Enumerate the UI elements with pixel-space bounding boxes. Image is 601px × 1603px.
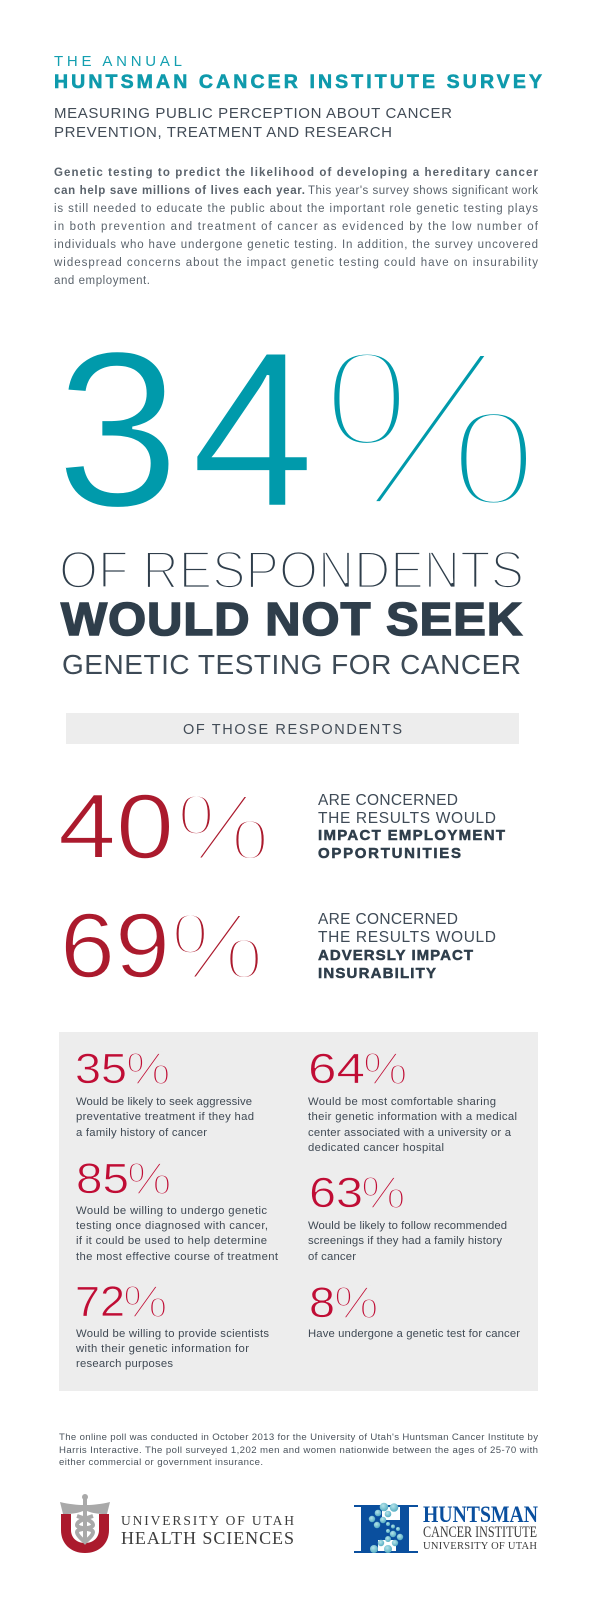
- finding: 85%: %: [127, 1154, 171, 1204]
- subtitle: PREVENTION, TREATMENT AND RESEARCH: [54, 124, 392, 141]
- finding: 8%: %: [334, 1278, 378, 1328]
- finding: 63%: [308, 1168, 507, 1263]
- finding: 35%: a family history of cancer: [76, 1127, 207, 1139]
- statistic: 40% employment: [58, 775, 270, 881]
- logo wordmark: [423, 1502, 538, 1552]
- header: survey title: HUNTSMAN CANCER INSTITUTE SURVEY: [54, 71, 542, 93]
- finding: 85%: if it could be used to help determine: [76, 1235, 267, 1247]
- icon: H with molecule strand: [354, 1503, 418, 1553]
- finding: 72%: %: [123, 1277, 167, 1327]
- panel: additional findings: [59, 1032, 538, 1391]
- hero statistic: 34%: 34: [56, 306, 314, 554]
- finding: 8%: Have undergone a genetic test for cancer: [308, 1328, 520, 1340]
- logo: Huntsman Cancer Institute: [354, 1502, 538, 1553]
- intro paragraph: is still needed to educate the public about the important role genetic testing plays: [54, 203, 538, 215]
- banner: of those respondents: OF THOSE RESPONDENTS: [183, 722, 402, 738]
- footnote: methodology: Harris Interactive. The poll surveyed 1,202 men and women nationwide between the ages of 25-70 with: [59, 1445, 538, 1456]
- finding: 64%: Would be most comfortable sharing: [308, 1096, 496, 1108]
- finding: 85%: testing once diagnosed with cancer,: [76, 1220, 268, 1232]
- header: survey title: THE ANNUAL: [54, 53, 182, 70]
- finding: 72%: [75, 1277, 269, 1370]
- statistic: 69% insurability: [60, 894, 264, 1000]
- intro paragraph: in both prevention and treatment of cancer as evidenced by the low number of: [54, 221, 539, 233]
- footnote: methodology: either commercial or government insurance.: [59, 1457, 263, 1468]
- finding: 64%: %: [363, 1044, 407, 1094]
- finding: 64%: their genetic information with a medical: [308, 1111, 517, 1123]
- intro paragraph: individuals who have undergone genetic testing. In addition, the survey uncovered: [54, 239, 538, 251]
- statistic: 69% insurability: 69: [60, 895, 170, 997]
- finding: 85%: [76, 1154, 279, 1263]
- description: insurability concern: [318, 911, 496, 982]
- finding: 63%: 63: [309, 1169, 363, 1217]
- finding: 63%: screenings if they had a family history: [308, 1235, 502, 1247]
- finding: 63%: %: [361, 1168, 405, 1218]
- finding: 35%: 35: [75, 1045, 127, 1093]
- finding: 35%: preventative treatment if they had: [76, 1111, 254, 1123]
- logo wordmark: CANCER INSTITUTE: [423, 1524, 537, 1541]
- intro paragraph: [53, 167, 539, 287]
- statistic: 69% insurability: %: [170, 894, 264, 1000]
- footnote: methodology: The online poll was conducted in October 2013 for the University of Utah's Huntsman Cancer Institute by: [59, 1432, 538, 1443]
- logo wordmark: UNIVERSITY OF UTAH: [121, 1513, 294, 1528]
- statistic: 40% employment: 40: [58, 776, 174, 878]
- intro paragraph: Genetic testing to predict the likelihood of developing a hereditary cancer: [54, 167, 539, 179]
- intro paragraph: and employment.: [54, 275, 150, 287]
- intro paragraph: can help save millions of lives each year.: [54, 185, 305, 197]
- description: insurability concern: INSURABILITY: [318, 965, 436, 982]
- intro paragraph: widespread concerns about the impact genetic testing could have on insurability: [53, 257, 538, 269]
- hero caption: GENETIC TESTING FOR CANCER: [62, 649, 521, 680]
- finding: 35%: %: [126, 1044, 170, 1094]
- header: survey title: [54, 53, 542, 93]
- icon: red U with caduceus: [60, 1494, 110, 1553]
- finding: 35%: [75, 1044, 254, 1139]
- finding: 63%: Would be likely to follow recommended: [308, 1220, 507, 1232]
- finding: 8%: 8: [309, 1279, 335, 1327]
- finding: 72%: Would be willing to provide scientists: [76, 1328, 269, 1340]
- finding: 8%: [308, 1278, 520, 1340]
- finding: 85%: the most effective course of treatment: [76, 1251, 279, 1263]
- logo wordmark: [121, 1513, 294, 1548]
- finding: 85%: 85: [76, 1155, 129, 1203]
- description: employment concern: IMPACT EMPLOYMENT: [318, 827, 505, 844]
- intro paragraph: This year's survey shows significant work: [308, 185, 538, 197]
- finding: 64%: dedicated cancer hospital: [308, 1142, 444, 1154]
- footnote: methodology: [59, 1432, 538, 1468]
- hero statistic: 34%: [56, 300, 541, 556]
- description: employment concern: OPPORTUNITIES: [318, 845, 461, 862]
- hero caption: WOULD NOT SEEK: [61, 594, 522, 646]
- finding: 63%: of cancer: [308, 1251, 356, 1263]
- finding: 64%: [308, 1044, 517, 1154]
- description: insurability concern: THE RESULTS WOULD: [318, 929, 496, 946]
- statistic: 40% employment: %: [176, 775, 270, 881]
- banner: of those respondents: [66, 713, 519, 744]
- logo wordmark: UNIVERSITY OF UTAH: [423, 1541, 537, 1552]
- logo: University of Utah Health Sciences: [60, 1494, 294, 1553]
- hero caption: [59, 541, 524, 680]
- description: insurability concern: ADVERSLY IMPACT: [318, 947, 473, 964]
- finding: 64%: center associated with a university or a: [308, 1127, 512, 1139]
- finding: 72%: with their genetic information for: [75, 1343, 249, 1355]
- hero caption: OF RESPONDENTS: [59, 541, 524, 600]
- finding: 72%: 72: [75, 1278, 125, 1326]
- finding: 72%: research purposes: [76, 1358, 173, 1370]
- description: employment concern: ARE CONCERNED: [318, 792, 458, 809]
- description: insurability concern: ARE CONCERNED: [318, 911, 458, 928]
- description: employment concern: [318, 792, 505, 862]
- logo wordmark: HEALTH SCIENCES: [121, 1528, 294, 1548]
- finding: 85%: Would be willing to undergo genetic: [76, 1205, 267, 1217]
- hero statistic: 34%: %: [319, 300, 541, 556]
- subtitle: MEASURING PUBLIC PERCEPTION ABOUT CANCER: [54, 105, 452, 122]
- logo wordmark: HUNTSMAN: [423, 1502, 538, 1527]
- subtitle: [54, 105, 452, 141]
- finding: 35%: Would be likely to seek aggressive: [76, 1096, 252, 1108]
- description: employment concern: THE RESULTS WOULD: [318, 810, 496, 827]
- finding: 64%: 64: [308, 1045, 365, 1093]
